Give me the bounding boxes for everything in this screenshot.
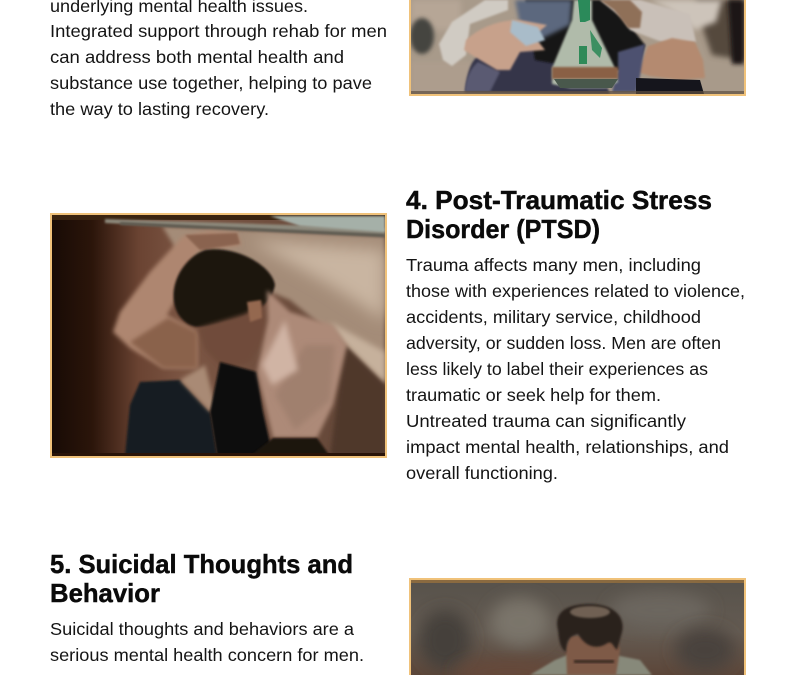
text block: PTSD description: Untreated trauma can significantly [406, 411, 686, 431]
text block: suicidal thoughts description [50, 619, 364, 665]
text block: section 3 closing paragraph: substance use together, helping to pave [50, 73, 372, 93]
text block: PTSD description: adversity, or sudden loss. Men are often [406, 333, 721, 353]
heading: section 5: Behavior [50, 578, 160, 608]
text block: PTSD description: those with experiences related to violence, [406, 281, 745, 301]
heading: section 4 [406, 185, 712, 244]
text block: PTSD description: Trauma affects many men, including [406, 255, 701, 275]
heading: section 5 [50, 549, 353, 608]
text block: section 3 closing paragraph: Integrated support through rehab for men [50, 21, 387, 41]
photo: distressed man clutching his head [50, 213, 387, 458]
text block: suicidal thoughts description: serious mental health concern for men. [50, 645, 364, 665]
heading: section 4: 4. Post-Traumatic Stress [406, 185, 712, 215]
text block: PTSD description [406, 255, 745, 483]
photo: man sitting with head bowed against a concrete wall [409, 578, 746, 675]
text block: PTSD description: less likely to label their experiences as [406, 359, 708, 379]
heading: section 5: 5. Suicidal Thoughts and [50, 549, 353, 579]
text block: section 3 closing paragraph: can address both mental health and [50, 47, 344, 67]
text block: PTSD description: accidents, military service, childhood [406, 307, 701, 327]
text block: section 3 closing paragraph: the way to lasting recovery. [50, 99, 269, 119]
photo: man using a glass water pipe on a couch [409, 0, 746, 96]
heading: section 4: Disorder (PTSD) [406, 214, 600, 244]
text block: PTSD description: traumatic or seek help for them. [406, 385, 661, 405]
text block: suicidal thoughts description: Suicidal thoughts and behaviors are a [50, 619, 354, 639]
text block: PTSD description: impact mental health, relationships, and [406, 437, 729, 457]
text block: section 3 closing paragraph [50, 0, 387, 119]
text block: PTSD description: overall functioning. [406, 463, 558, 483]
